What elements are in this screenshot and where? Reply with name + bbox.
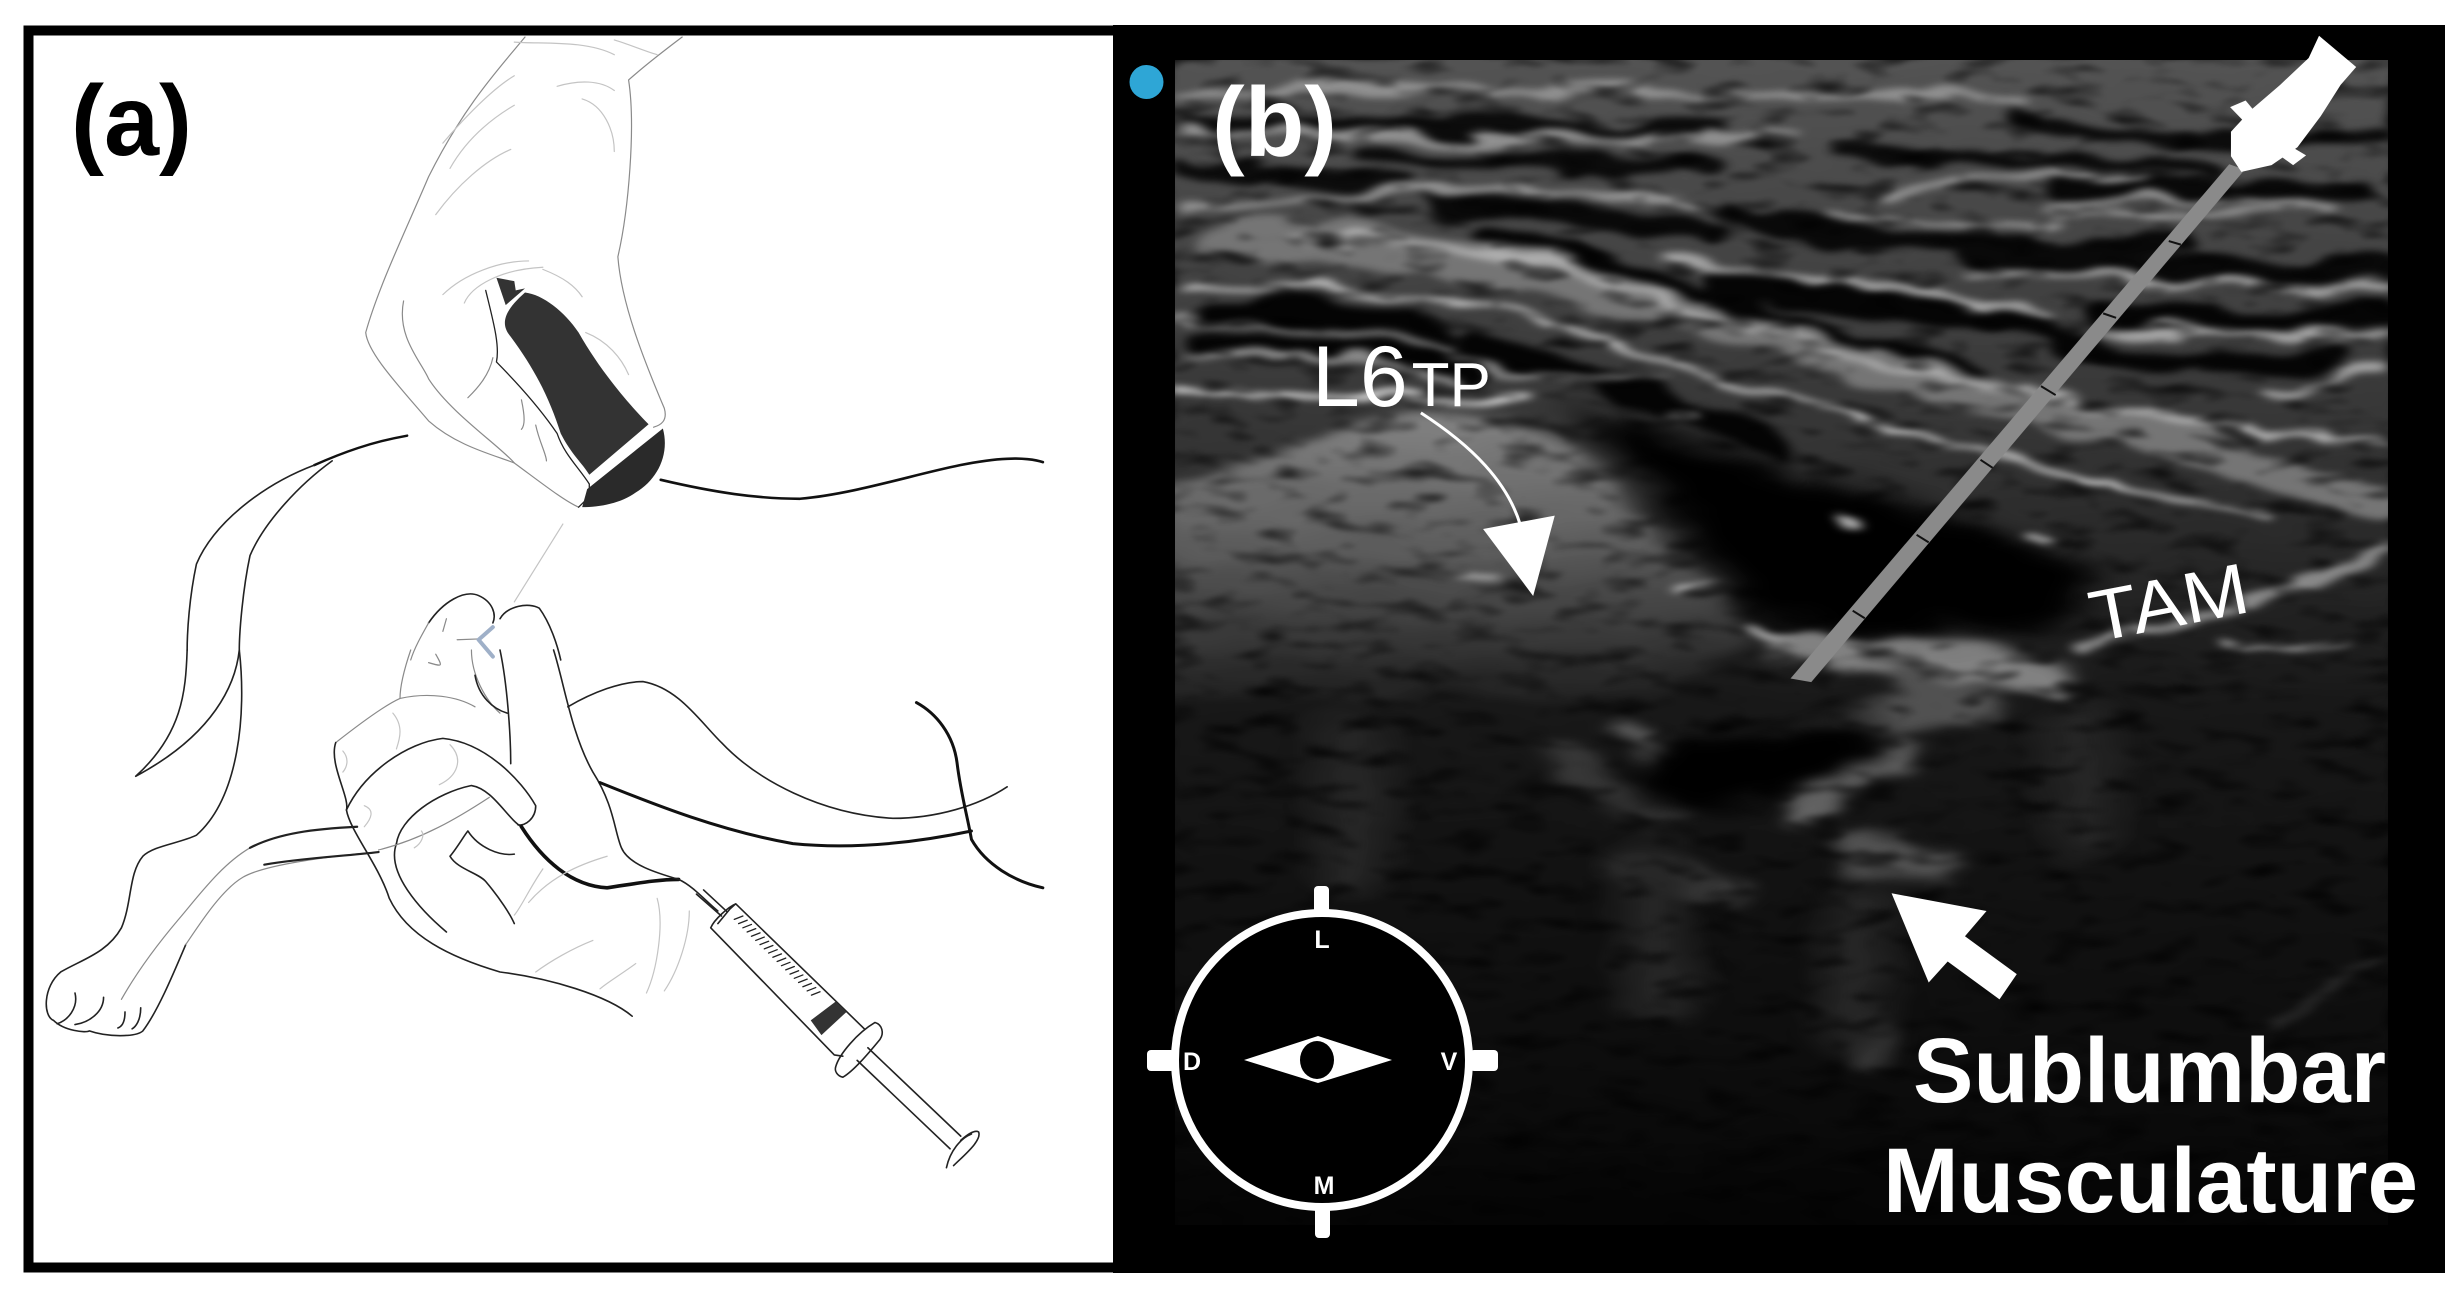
marker: blue orientation dot (1130, 65, 1164, 99)
illustration: dog body and limb outlines (187, 436, 1043, 660)
icon: orientation compass (1147, 886, 1498, 1238)
icon: probe top marker (496, 278, 525, 305)
dark gaps top (1179, 116, 2388, 187)
icon: orientation compass: D (1183, 1048, 1201, 1076)
arrow: curved pointer to L6 transverse process (1421, 413, 1555, 596)
deep tissue glow (1559, 675, 1982, 1062)
icon: needle (1791, 36, 2356, 682)
icon: ultrasound probe body (505, 293, 649, 475)
icon: orientation compass: V (1441, 1048, 1458, 1076)
label: Sublumbar Musculature: Sublumbar (1913, 1020, 2386, 1122)
illustration: gloved hand holding limb and syringe (334, 650, 718, 1016)
panel (b): ultrasound image (1113, 25, 2445, 1273)
arrow: pointer to sublumbar musculature (1892, 893, 2017, 999)
heading: panel label (b): (b) (1212, 67, 1337, 177)
label: TAM: TAM (2083, 549, 2255, 658)
label: Sublumbar Musculature: Musculature (1883, 1130, 2418, 1232)
icon: orientation compass: L (1314, 926, 1330, 954)
label: Sublumbar Musculature (1883, 1020, 2418, 1232)
panel (a): procedure illustration (28, 30, 1118, 1268)
label: L6 TP: L6TP (1312, 329, 1491, 425)
icon: probe footprint (582, 428, 665, 507)
hypoechoic shadow (1568, 402, 2095, 635)
illustration: hand holding ultrasound probe (366, 37, 682, 507)
icon: orientation compass: M (1314, 1172, 1334, 1200)
heading: panel label (a): (a) (71, 65, 192, 177)
transverse process hump (1162, 411, 1749, 700)
ultrasound scan texture (1162, 50, 2398, 1235)
bright bands (1179, 90, 2336, 224)
illustration: syringe (696, 890, 979, 1168)
